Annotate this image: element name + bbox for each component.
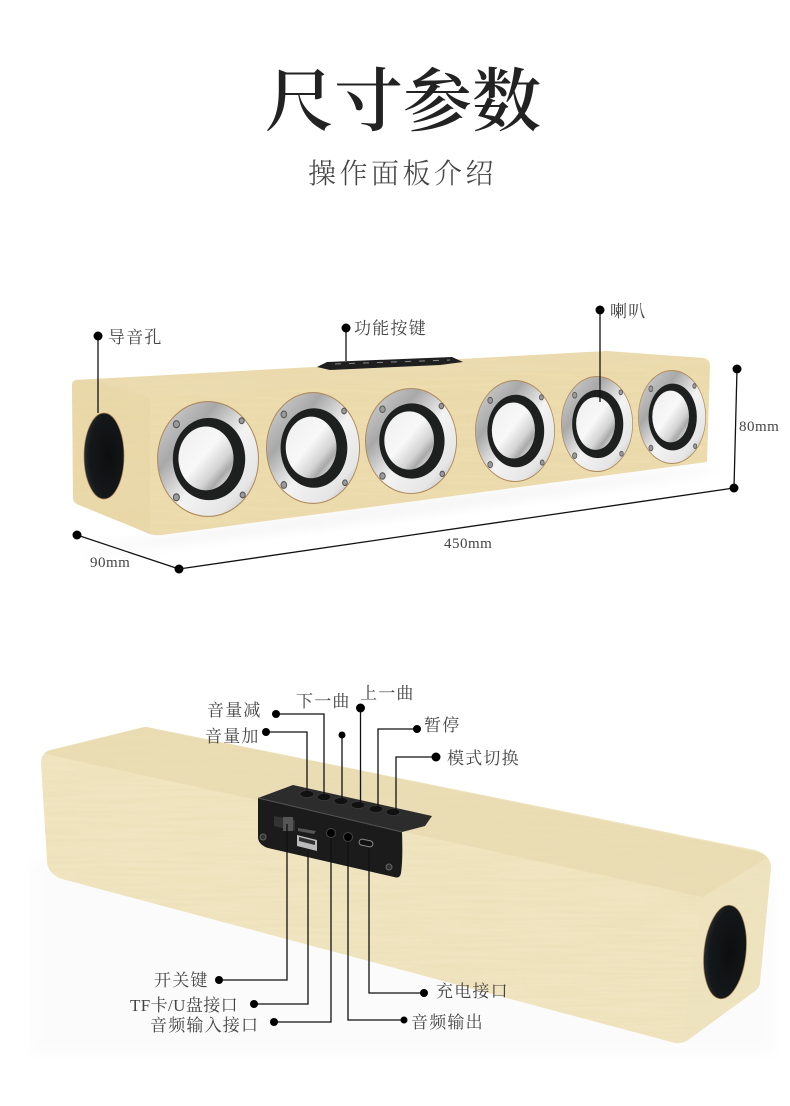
- dimension: depth 90mm: 90mm: [90, 555, 130, 571]
- callout: TF / USB port: [130, 850, 308, 1015]
- callout: volume up: [205, 727, 307, 792]
- callout: TF / USB port: TF卡/U盘接口: [130, 996, 238, 1015]
- callout: charging port: [369, 848, 509, 1001]
- dimension: length 450mm: [179, 484, 738, 569]
- control panel on top: [317, 357, 463, 370]
- callout: audio input: 音频输入接口: [150, 1016, 259, 1035]
- callout: function keys: 功能按键: [354, 319, 427, 338]
- callout: previous track: 上一曲: [360, 684, 415, 703]
- callout: volume down: 音量减: [207, 701, 262, 720]
- callout: pause: [378, 716, 460, 807]
- front speaker product photo: [72, 351, 710, 536]
- callout: mode switch: [396, 749, 520, 811]
- callout: volume down: [207, 701, 324, 795]
- dimension: height 80mm: 80mm: [739, 419, 779, 435]
- callout: speaker: [596, 302, 646, 402]
- dimension: height 80mm: [732, 364, 779, 488]
- callout: power switch: [154, 824, 287, 990]
- speaker body: [72, 351, 710, 536]
- rear speaker product photo: [30, 720, 780, 1055]
- callout: next track: 下一曲: [296, 692, 351, 711]
- callout: pause: 暂停: [424, 716, 460, 735]
- callout: audio input: [150, 838, 331, 1035]
- buttons: [300, 790, 400, 816]
- dimension: length 450mm: 450mm: [444, 536, 492, 552]
- callout: volume up: 音量加: [205, 727, 260, 746]
- callout: next track: [296, 692, 351, 799]
- callout: function keys: [342, 319, 427, 361]
- subtitle: 操作面板介绍: [308, 158, 497, 190]
- callout: sound port: [94, 328, 163, 413]
- callout: charging port: 充电接口: [436, 982, 509, 1001]
- callout: sound port: 导音孔: [108, 328, 163, 347]
- callout: audio output: [348, 842, 484, 1032]
- sound port: [699, 903, 751, 1001]
- dimension: depth 90mm: [72, 530, 184, 574]
- callout: mode switch: 模式切换: [447, 749, 520, 768]
- callout: audio output: 音频输出: [411, 1013, 484, 1032]
- callout: speaker: 喇叭: [610, 302, 646, 321]
- speaker body: [30, 720, 780, 1050]
- callout: power switch: 开关键: [154, 971, 209, 990]
- control panel: [258, 785, 432, 878]
- ports: [260, 816, 392, 870]
- callout: previous track: [356, 684, 415, 803]
- sound port: [84, 413, 124, 499]
- title: 尺寸参数: [265, 64, 541, 140]
- speaker drivers: [157, 370, 706, 517]
